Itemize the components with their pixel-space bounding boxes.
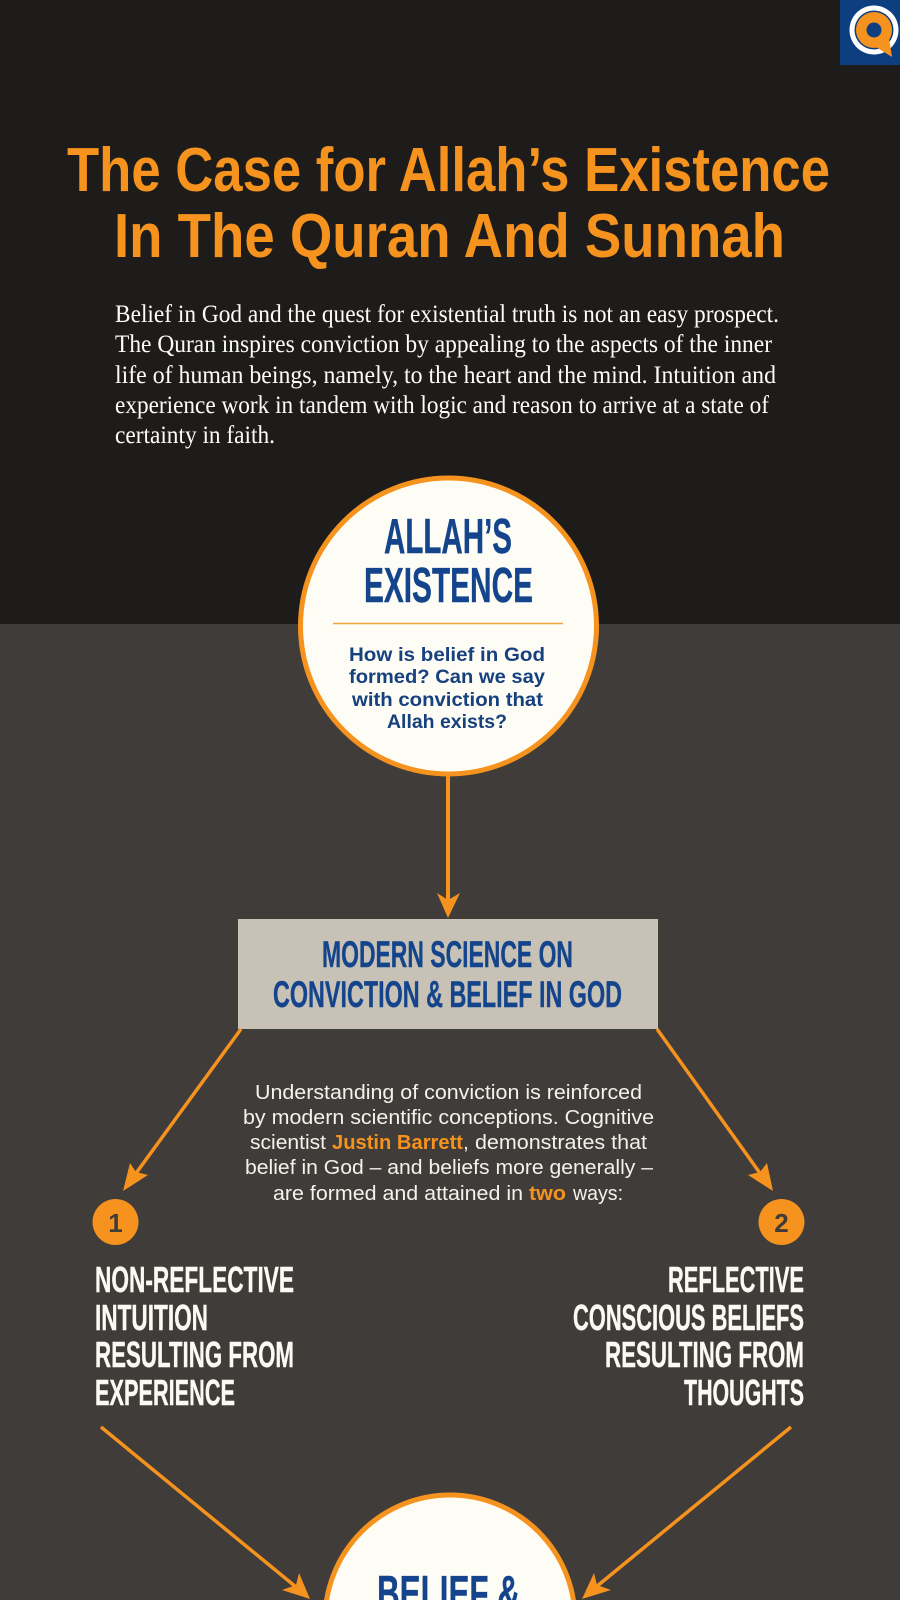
- badge: number 2: 2: [774, 1208, 789, 1238]
- text: reflective conscious beliefs: THOUGHTS: [684, 1372, 804, 1413]
- badge: number 2: [758, 1199, 804, 1245]
- body text block: Justin Barrett: [332, 1132, 463, 1154]
- panel: Allah's existence circle: [300, 478, 596, 774]
- body text block: two: [529, 1183, 566, 1205]
- body text block: are formed and attained in: [273, 1183, 523, 1205]
- panel: modern science box: [238, 919, 658, 1029]
- intro text block: experience work in tandem with logic and reason to arrive at a state of: [115, 390, 769, 419]
- body text block: belief in God – and beliefs more generally –: [245, 1157, 654, 1179]
- badge: number 1: [92, 1199, 138, 1245]
- panel: belief circle: [324, 1492, 576, 1600]
- arrow: box to item 2: [657, 1029, 773, 1191]
- title: In The Quran And Sunnah: [114, 202, 785, 271]
- intro text block: certainty in faith.: [115, 420, 275, 449]
- title: [67, 136, 830, 271]
- text: non-reflective intuition: EXPERIENCE: [95, 1372, 235, 1413]
- panel: Allah's existence circle: EXISTENCE: [364, 559, 533, 613]
- arrow: item 2 to belief circle: [582, 1427, 791, 1599]
- badge: number 1: 1: [108, 1208, 123, 1238]
- icon: logo: [840, 0, 900, 65]
- arrow: item 1 to belief circle: [101, 1427, 310, 1599]
- panel: Allah's existence circle: formed? Can we say: [349, 666, 545, 688]
- text: reflective conscious beliefs: [573, 1259, 804, 1413]
- body text block: by modern scientific conceptions. Cognitive: [243, 1107, 654, 1129]
- text: reflective conscious beliefs: REFLECTIVE: [668, 1259, 804, 1300]
- text: non-reflective intuition: INTUITION: [95, 1297, 208, 1338]
- body text block: [243, 1082, 654, 1205]
- panel: Allah's existence circle: ALLAH’S: [384, 510, 512, 564]
- body text block: , demonstrates that: [463, 1132, 647, 1154]
- panel: Allah's existence circle: How is belief in God: [349, 644, 545, 666]
- intro text block: [115, 299, 779, 449]
- intro text block: Belief in God and the quest for existential truth is not an easy prospect.: [115, 299, 779, 328]
- body text block: Understanding of conviction is reinforced: [255, 1082, 642, 1104]
- body text block: ways:: [572, 1183, 623, 1205]
- arrow: circle to box: [437, 776, 460, 918]
- body text block: scientist: [250, 1132, 326, 1154]
- intro text block: The Quran inspires conviction by appealing to the aspects of the inner: [115, 329, 772, 358]
- panel: modern science box: CONVICTION & BELIEF IN GOD: [273, 974, 622, 1015]
- text: non-reflective intuition: RESULTING FROM: [95, 1334, 294, 1375]
- arrow: box to item 1: [123, 1029, 241, 1191]
- panel: Allah's existence circle: with conviction that: [351, 689, 544, 711]
- intro text block: life of human beings, namely, to the heart and the mind. Intuition and: [115, 360, 776, 389]
- text: non-reflective intuition: [95, 1259, 294, 1413]
- panel: modern science box: MODERN SCIENCE ON: [322, 934, 573, 975]
- text: non-reflective intuition: NON-REFLECTIVE: [95, 1259, 294, 1300]
- panel: Allah's existence circle: Allah exists?: [387, 711, 507, 733]
